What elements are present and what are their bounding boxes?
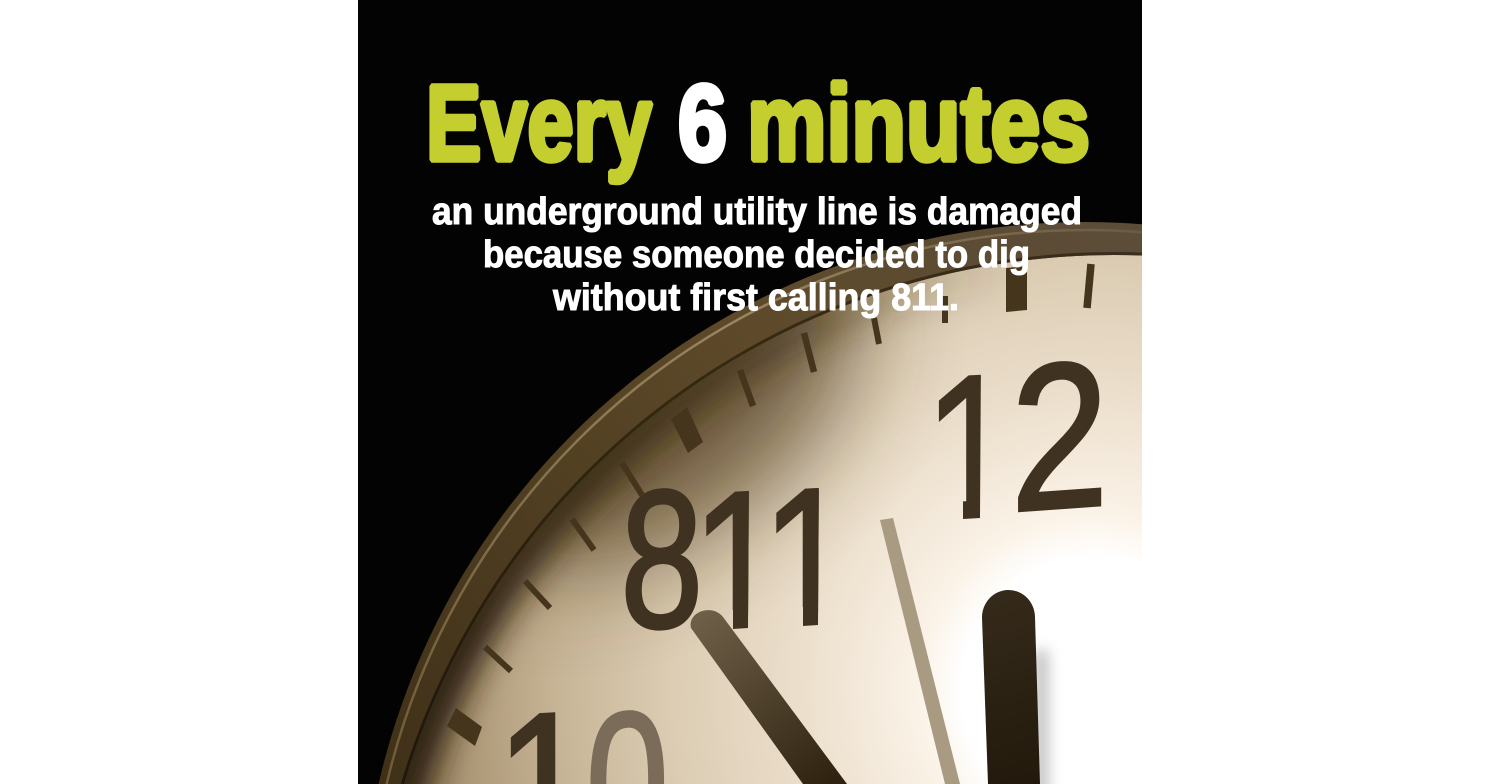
clock numeral 10 (510, 710, 664, 784)
clock rim (378, 222, 1142, 784)
headline (426, 62, 1090, 183)
clock numeral 12 (938, 361, 1102, 519)
headline: minutes (747, 62, 1090, 183)
subheading (432, 191, 1082, 319)
clock face (404, 255, 1142, 784)
hour hand (982, 590, 1040, 784)
clock numeral 811: 1 (762, 445, 856, 669)
hour hand shadow (1034, 650, 1048, 784)
clock numeral 12: 2 (1011, 317, 1109, 555)
headline: 6 (678, 62, 727, 183)
minute hand (691, 610, 847, 784)
clock numeral 811 (626, 488, 819, 631)
second hand (880, 518, 960, 784)
minute ticks (447, 264, 1091, 746)
black poster panel (358, 0, 1142, 784)
headline: Every (426, 62, 652, 183)
clock numeral 811: 1 (692, 448, 786, 672)
clock illustration (378, 222, 1142, 784)
subheading: without first calling 811. (552, 277, 959, 319)
clock numeral 811: 8 (620, 448, 703, 671)
clock numeral 12: 1 (924, 331, 1021, 564)
subheading: an underground utility line is damaged (432, 191, 1082, 233)
subheading: because someone decided to dig (483, 234, 1030, 276)
